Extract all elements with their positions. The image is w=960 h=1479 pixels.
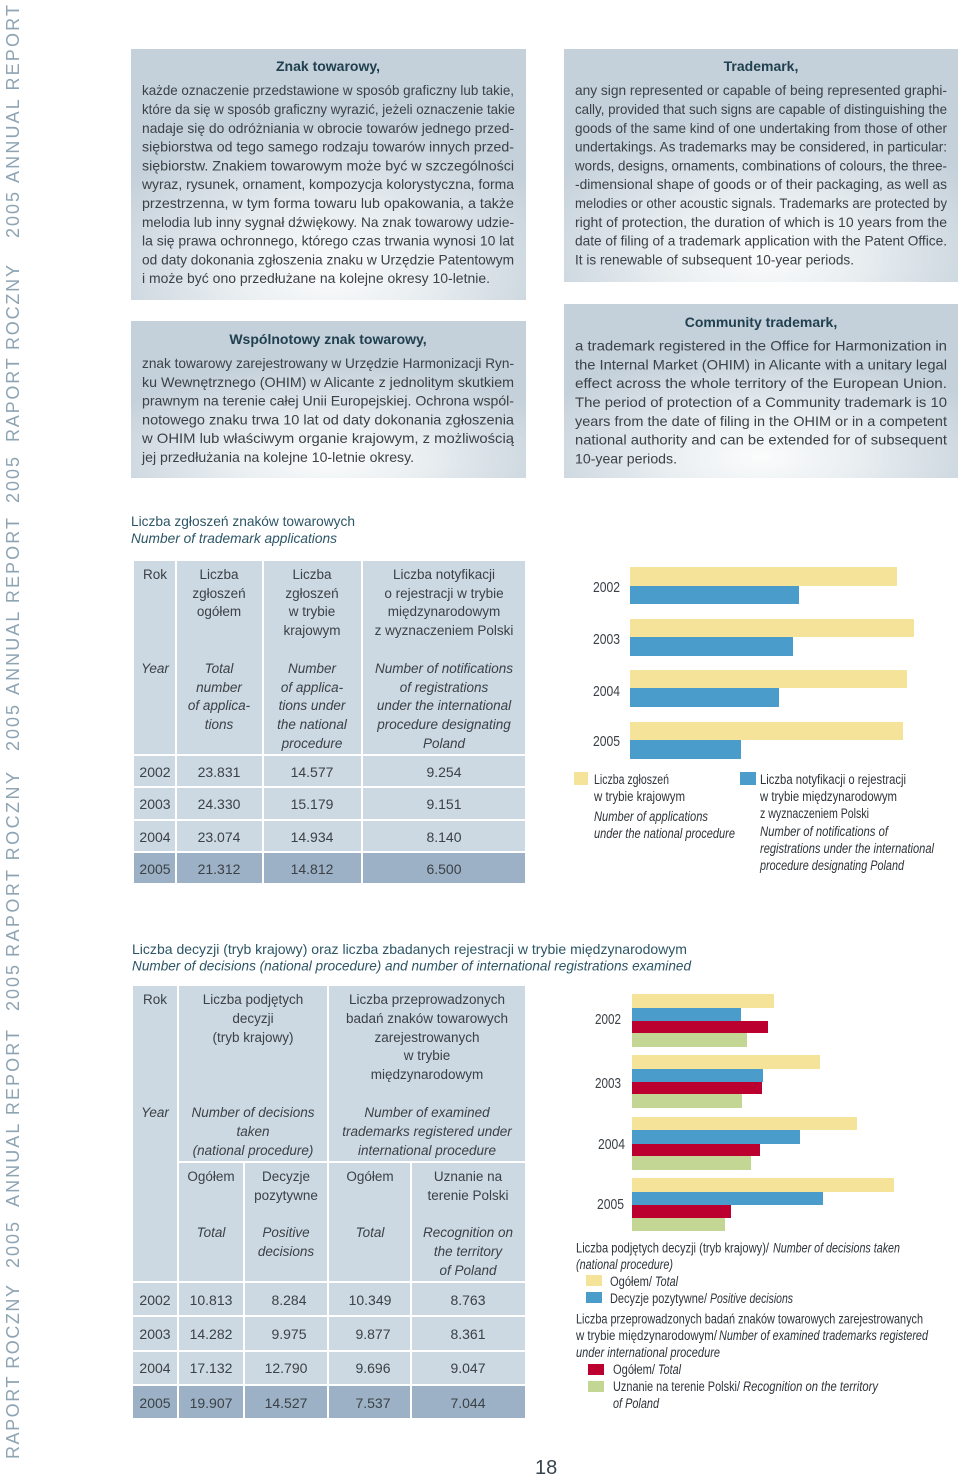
text block: Community trademark definition: 10-year periods. xyxy=(575,450,677,466)
text block: Znak towarowy definition: la się prawa ochronnego, którego czas trwania wynosi 10 lat xyxy=(142,232,514,248)
side running text: RAPORT ROCZNY xyxy=(3,265,23,442)
legend: examinations: Ogółem/ xyxy=(613,1362,655,1377)
heading: decisions table title xyxy=(132,941,692,974)
table header labels: international procedure xyxy=(358,1143,496,1158)
table data rows: 9.696 xyxy=(355,1360,391,1376)
bar chart: decisions and examinations xyxy=(595,994,894,1231)
table data rows: 17.132 xyxy=(190,1360,233,1376)
heading: trademark applications table title: Liczba zgłoszeń znaków towarowych xyxy=(131,513,355,529)
table data rows: 9.877 xyxy=(355,1326,391,1342)
table header labels: ogółem xyxy=(197,604,241,619)
legend: international procedure: procedure designating Poland xyxy=(759,858,904,873)
text block: Community trademark definition: years from the date of filing in the OHIM or in a competent xyxy=(575,413,947,429)
table header labels xyxy=(141,567,513,751)
legend: decisions xyxy=(576,1240,900,1306)
legend: national procedure xyxy=(574,772,735,841)
table header labels: trademarks registered under xyxy=(342,1124,512,1139)
legend: national procedure: under the national procedure xyxy=(594,826,735,841)
table header labels: tions under xyxy=(279,698,346,713)
table header labels: Number xyxy=(288,661,337,676)
table header labels: Year xyxy=(141,1105,169,1120)
text block: Trademark definition: right of protection, the duration of which is 10 years from the xyxy=(575,214,947,230)
bar chart: applications: 2003 xyxy=(593,631,620,648)
table data rows: 23.831 xyxy=(198,764,241,780)
legend: decisions: (national procedure) xyxy=(576,1257,673,1272)
bar chart: decisions and examinations: 2003 xyxy=(595,1075,621,1092)
table header labels: Ogółem xyxy=(346,1169,394,1184)
heading: decisions table title: Liczba decyzji (tryb krajowy) oraz liczba zbadanych rejestracji w trybie międzynarodowym xyxy=(132,941,687,957)
table data rows: 14.577 xyxy=(291,764,334,780)
table data rows: 2005 xyxy=(139,1395,171,1411)
table header labels: the territory xyxy=(434,1244,503,1259)
table header labels: międzynarodowym xyxy=(388,604,500,619)
table header labels: Uznanie na xyxy=(434,1169,503,1184)
table header labels: the national xyxy=(277,717,348,732)
side running text: ANNUAL REPORT xyxy=(3,1030,23,1207)
table data rows: 9.047 xyxy=(450,1360,486,1376)
table data rows: 8.361 xyxy=(450,1326,486,1342)
text block: Community trademark definition: a trademark registered in the Office for Harmonization in xyxy=(575,338,947,354)
legend: examinations: of Poland xyxy=(613,1396,659,1411)
table header labels: zgłoszeń xyxy=(285,586,339,601)
table header labels: Rok xyxy=(143,992,167,1007)
legend: examinations: Recognition on the territory xyxy=(743,1379,879,1394)
table header labels: Total xyxy=(356,1225,385,1240)
table header labels: Liczba xyxy=(199,567,239,582)
table header labels: tions xyxy=(205,717,234,732)
legend: decisions: Positive decisions xyxy=(710,1291,793,1306)
table header labels: Positive xyxy=(262,1225,310,1240)
page number: 18 xyxy=(535,1457,557,1479)
text block: Community trademark definition: effect across the whole territory of the European Union. xyxy=(575,375,947,391)
side running text: 2005 xyxy=(3,705,23,751)
text block: Wspólnotowy znak definition: notowego znaku trwa 10 lat od daty dokonania zgłoszenia xyxy=(142,412,514,428)
text block: Znak towarowy definition: siębiorstwa od tego samego rodzaju towarów innych przed- xyxy=(142,138,514,154)
legend: international procedure: z wyznaczeniem Polski xyxy=(760,806,869,821)
bar chart: decisions and examinations: 2002 xyxy=(595,1011,621,1028)
text block: Trademark definition: goods of the same kind of one undertaking from those of other xyxy=(575,120,947,136)
heading: trademark applications table title xyxy=(131,513,355,546)
text block: Wspólnotowy znak definition xyxy=(141,355,514,465)
table: decisions and examinations xyxy=(133,986,525,1418)
legend: international procedure: Number of notifications of xyxy=(760,824,889,839)
table header labels: Number of examined xyxy=(364,1105,490,1120)
table data rows: 10.813 xyxy=(190,1292,233,1308)
table data rows: 2002 xyxy=(139,764,171,780)
table header labels: taken xyxy=(236,1124,270,1139)
side running text: ANNUAL REPORT xyxy=(3,518,23,695)
side running text: 2005 xyxy=(3,965,23,1011)
text block: Community trademark definition: national authority and can be extended for of subsequent xyxy=(575,432,947,448)
text block: Znak towarowy definition: przestrzenna, w tym forma towaru lub opakowania, a także xyxy=(142,195,514,211)
table data rows: 19.907 xyxy=(190,1395,233,1411)
table header labels: zarejestrowanych xyxy=(374,1030,480,1045)
table header labels: zgłoszeń xyxy=(192,586,246,601)
table data rows: 2004 xyxy=(139,829,171,845)
table header labels: badań znaków towarowych xyxy=(346,1011,508,1026)
text block: Community trademark definition: The period of protection of a Community trademark is 10 xyxy=(575,394,947,410)
text block: Znak towarowy definition: i może być ono przedłużane na kolejne okresy 10-letnie. xyxy=(142,270,490,286)
legend: decisions: Decyzje pozytywne/ xyxy=(610,1291,707,1306)
panel: Wspólnotowy znak towarowy xyxy=(131,321,526,478)
table data rows: 7.537 xyxy=(355,1395,391,1411)
text block: Trademark definition: -dimensional shape of goods or of their packaging, as well as xyxy=(575,176,947,192)
table header labels: z wyznaczeniem Polski xyxy=(375,623,513,638)
legend: decisions: Ogółem/ xyxy=(610,1274,652,1289)
table header labels: międzynarodowym xyxy=(371,1067,483,1082)
legend: examinations: under international procedure xyxy=(576,1345,720,1360)
text block: Znak towarowy definition xyxy=(141,82,515,286)
text block: Trademark definition: cally, provided that such signs are capable of distinguishing the xyxy=(575,101,947,117)
table data rows: 6.500 xyxy=(426,861,462,877)
text block: Trademark definition xyxy=(574,82,947,268)
table data rows: 12.790 xyxy=(265,1360,308,1376)
table header labels: Liczba przeprowadzonych xyxy=(349,992,505,1007)
table header labels: of Poland xyxy=(439,1263,497,1278)
table header labels: Liczba xyxy=(292,567,332,582)
table header labels: procedure xyxy=(281,736,342,751)
text block: Znak towarowy definition: siębiorstw. Znakiem towarowym może być w szczególności xyxy=(142,158,514,174)
panel: Trademark xyxy=(564,49,958,282)
table data rows xyxy=(139,1292,486,1411)
table header labels: under the international xyxy=(377,698,512,713)
bar chart: decisions and examinations: 2004 xyxy=(598,1136,625,1153)
table data rows xyxy=(139,764,462,877)
text block: Znak towarowy definition: każde oznaczenie przedstawione w sposób graficzny lub takie, xyxy=(142,82,514,98)
table header labels: krajowym xyxy=(283,623,341,638)
text block: Trademark definition: undertakings. As trademarks may be considered, in particular: xyxy=(575,138,947,154)
table header labels: decisions xyxy=(258,1244,314,1259)
heading: Wspólnotowy znak towarowy: Wspólnotowy znak towarowy, xyxy=(229,331,427,347)
heading: Community trademark: Community trademark, xyxy=(685,314,837,330)
panel: Community trademark xyxy=(564,304,958,478)
text block: Wspólnotowy znak definition: ku Wewnętrznego (OHIM) w Alicante z jednolitym skutkiem xyxy=(142,374,514,390)
table header labels: Total xyxy=(197,1225,226,1240)
table: trademark applications xyxy=(134,561,525,883)
side running text: RAPORT ROCZNY xyxy=(3,772,23,957)
table data rows: 2004 xyxy=(139,1360,171,1376)
heading: trademark applications table title: Number of trademark applications xyxy=(131,530,337,546)
table data rows: 9.254 xyxy=(426,764,462,780)
legend: examinations: w trybie międzynarodowym/ xyxy=(575,1328,717,1343)
legend: international procedure xyxy=(740,772,935,873)
side running text xyxy=(3,5,23,1459)
table header labels: number xyxy=(196,680,242,695)
bar chart: applications: 2005 xyxy=(593,733,620,750)
table header labels: terenie Polski xyxy=(427,1188,509,1203)
table header labels: Rok xyxy=(143,567,167,582)
panel: Znak towarowy xyxy=(131,49,526,300)
table header labels xyxy=(141,992,513,1278)
table data rows: 21.312 xyxy=(198,861,241,877)
table data rows: 10.349 xyxy=(349,1292,392,1308)
legend: examinations xyxy=(575,1312,928,1411)
legend: international procedure: w trybie międzynarodowym xyxy=(759,789,897,804)
bar chart: applications: 2004 xyxy=(593,683,620,700)
text block: Community trademark definition: the Internal Market (OHIM) in Alicante with a unitary legal xyxy=(575,356,947,372)
table data rows: 7.044 xyxy=(450,1395,486,1411)
table data rows: 2003 xyxy=(139,1326,171,1342)
side running text: 2005 xyxy=(3,192,23,238)
text block: Wspólnotowy znak definition: prawnym na terenie całej Unii Europejskiej. Ochrona wspól- xyxy=(142,392,514,408)
text block: Trademark definition: words, designs, ornaments, combinations of colours, the three- xyxy=(574,158,947,174)
bar chart: applications: 2002 xyxy=(593,579,620,596)
table header labels: Number of notifications xyxy=(375,661,513,676)
table data rows: 2005 xyxy=(139,861,171,877)
text block: Znak towarowy definition: które da się w sposób graficzny wyrazić, jeżeli oznaczenie takie xyxy=(142,101,515,117)
text block: Znak towarowy definition: melodia lub inny sygnał dźwiękowy. Na znak towarowy udzie- xyxy=(142,214,514,230)
table data rows: 23.074 xyxy=(198,829,241,845)
table header labels: o rejestracji w trybie xyxy=(384,586,504,601)
table data rows: 14.527 xyxy=(265,1395,308,1411)
table data rows: 9.975 xyxy=(271,1326,307,1342)
table data rows: 8.284 xyxy=(271,1292,307,1308)
table header labels: Poland xyxy=(423,736,466,751)
legend: decisions: Liczba podjętych decyzji (tryb krajowy)/ xyxy=(576,1240,769,1256)
side running text: RAPORT ROCZNY xyxy=(3,1285,23,1459)
table header labels: Total xyxy=(205,661,234,676)
text block: Wspólnotowy znak definition: jej przedłużania na kolejne 10-letnie okresy. xyxy=(141,449,414,465)
text block: Znak towarowy definition: nadaje się do odróżniania w obrocie towarów jednego przed- xyxy=(142,120,514,136)
table data rows: 9.151 xyxy=(426,796,462,812)
table header labels: of registrations xyxy=(400,680,489,695)
table data rows: 14.282 xyxy=(190,1326,233,1342)
table header labels: Liczba notyfikacji xyxy=(393,567,495,582)
table header labels: procedure designating xyxy=(376,717,511,732)
table header labels: w trybie xyxy=(403,1048,450,1063)
text block: Community trademark definition xyxy=(575,338,947,466)
legend: international procedure: Liczba notyfikacji o rejestracji xyxy=(760,772,906,787)
heading: Znak towarowy: Znak towarowy, xyxy=(276,58,380,74)
table header labels: of applica- xyxy=(188,698,251,713)
legend: examinations: Total xyxy=(658,1362,682,1377)
text block: Trademark definition: It is renewable of subsequent 10-year periods. xyxy=(575,252,854,268)
table header labels: (tryb krajowy) xyxy=(212,1030,294,1045)
text block: Trademark definition: date of filing of a trademark application with the Patent Office. xyxy=(575,232,947,248)
side running text: ANNUAL REPORT xyxy=(3,5,23,183)
table header labels: Recognition on xyxy=(423,1225,513,1240)
side running text: 2005 xyxy=(3,457,23,503)
text block: Znak towarowy definition: od daty dokonania zgłoszenia znaku w Urzędzie Patentowym xyxy=(142,252,514,268)
table header labels: pozytywne xyxy=(254,1188,318,1203)
table header labels: Decyzje xyxy=(262,1169,310,1184)
table header labels: Year xyxy=(141,661,169,676)
table header labels: w trybie xyxy=(288,604,335,619)
table data rows: 24.330 xyxy=(198,796,241,812)
legend: national procedure: Number of applications xyxy=(594,809,708,824)
legend: national procedure: w trybie krajowym xyxy=(593,789,685,804)
table header labels: decyzji xyxy=(232,1011,274,1026)
table data rows: 14.934 xyxy=(291,829,334,845)
legend: examinations: Uznanie na terenie Polski/ xyxy=(613,1379,740,1394)
table data rows: 15.179 xyxy=(291,796,334,812)
table header labels: Number of decisions xyxy=(191,1105,315,1120)
table data rows: 14.812 xyxy=(291,861,334,877)
side running text: 2005 xyxy=(3,1222,23,1268)
table data rows: 2003 xyxy=(139,796,171,812)
table data rows: 8.763 xyxy=(450,1292,486,1308)
table header labels: (national procedure) xyxy=(193,1143,313,1158)
table data rows: 2002 xyxy=(139,1292,171,1308)
text block: Wspólnotowy znak definition: znak towarowy zarejestrowany w Urzędzie Harmonizacji Ryn- xyxy=(142,355,514,371)
text block: Wspólnotowy znak definition: w OHIM lub właściwym organie krajowym, z możliwością xyxy=(141,430,514,446)
legend: national procedure: Liczba zgłoszeń xyxy=(594,772,669,787)
text block: Trademark definition: any sign represented or capable of being represented graphi- xyxy=(575,82,947,98)
bar chart: applications xyxy=(593,567,914,759)
legend: decisions: Total xyxy=(655,1274,679,1289)
bar chart: decisions and examinations: 2005 xyxy=(597,1196,624,1213)
table header labels: of applica- xyxy=(281,680,344,695)
heading: Trademark: Trademark, xyxy=(724,58,798,74)
text block: Znak towarowy definition: wyraz, rysunek, ornament, kompozycja kolorystyczna, forma xyxy=(141,176,514,192)
legend: decisions: Number of decisions taken xyxy=(773,1240,900,1256)
heading: decisions table title: Number of decisions (national procedure) and number of international registrations examined xyxy=(132,958,692,974)
table header labels: Ogółem xyxy=(187,1169,235,1184)
table data rows: 8.140 xyxy=(426,829,462,845)
table header labels: Liczba podjętych xyxy=(203,992,303,1007)
